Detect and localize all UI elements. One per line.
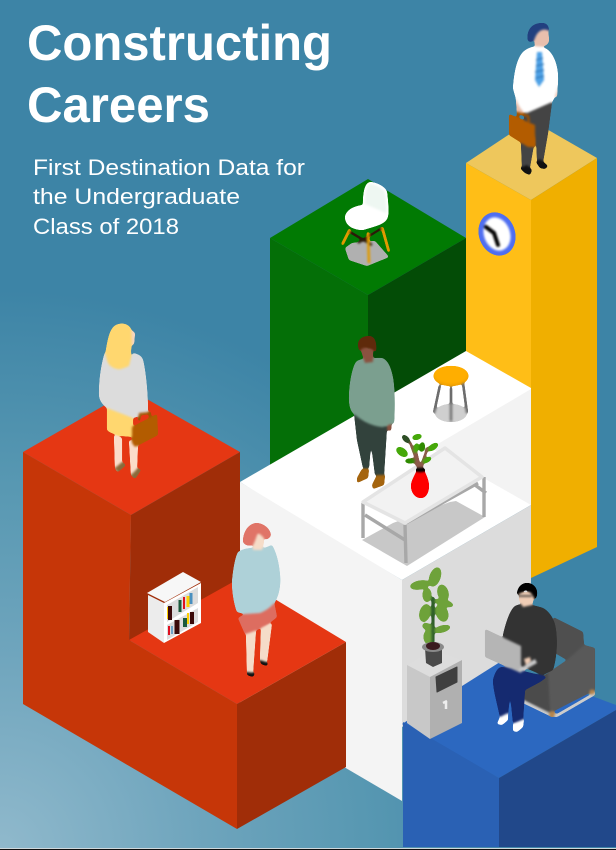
person: man with briefcase [509,23,558,175]
white block [240,351,531,801]
subtitle: Class of 2018 [33,214,179,239]
subtitle: the Undergraduate [33,184,240,209]
title: Constructing [27,15,332,71]
armchair [520,617,595,717]
title [27,15,332,133]
blue block [402,662,616,847]
icon: clock [473,207,521,261]
bookshelf [147,572,201,643]
waste bin [407,650,462,739]
plant in pot [409,566,454,644]
subtitle [33,155,306,239]
subtitle: First Destination Data for [33,155,306,180]
pot [422,642,444,667]
person: man in green sweater [349,336,395,489]
chair [342,182,389,266]
green block [270,179,466,468]
person: red-haired woman [232,523,280,677]
red block [23,390,346,829]
person: blonde woman with briefcase [99,324,158,479]
stool [434,366,468,422]
bottom edge line [0,848,616,850]
vase with branches [394,433,440,498]
table [362,448,486,566]
person: man with laptop [485,583,557,732]
yellow block [466,120,597,578]
title: Careers [27,77,210,133]
